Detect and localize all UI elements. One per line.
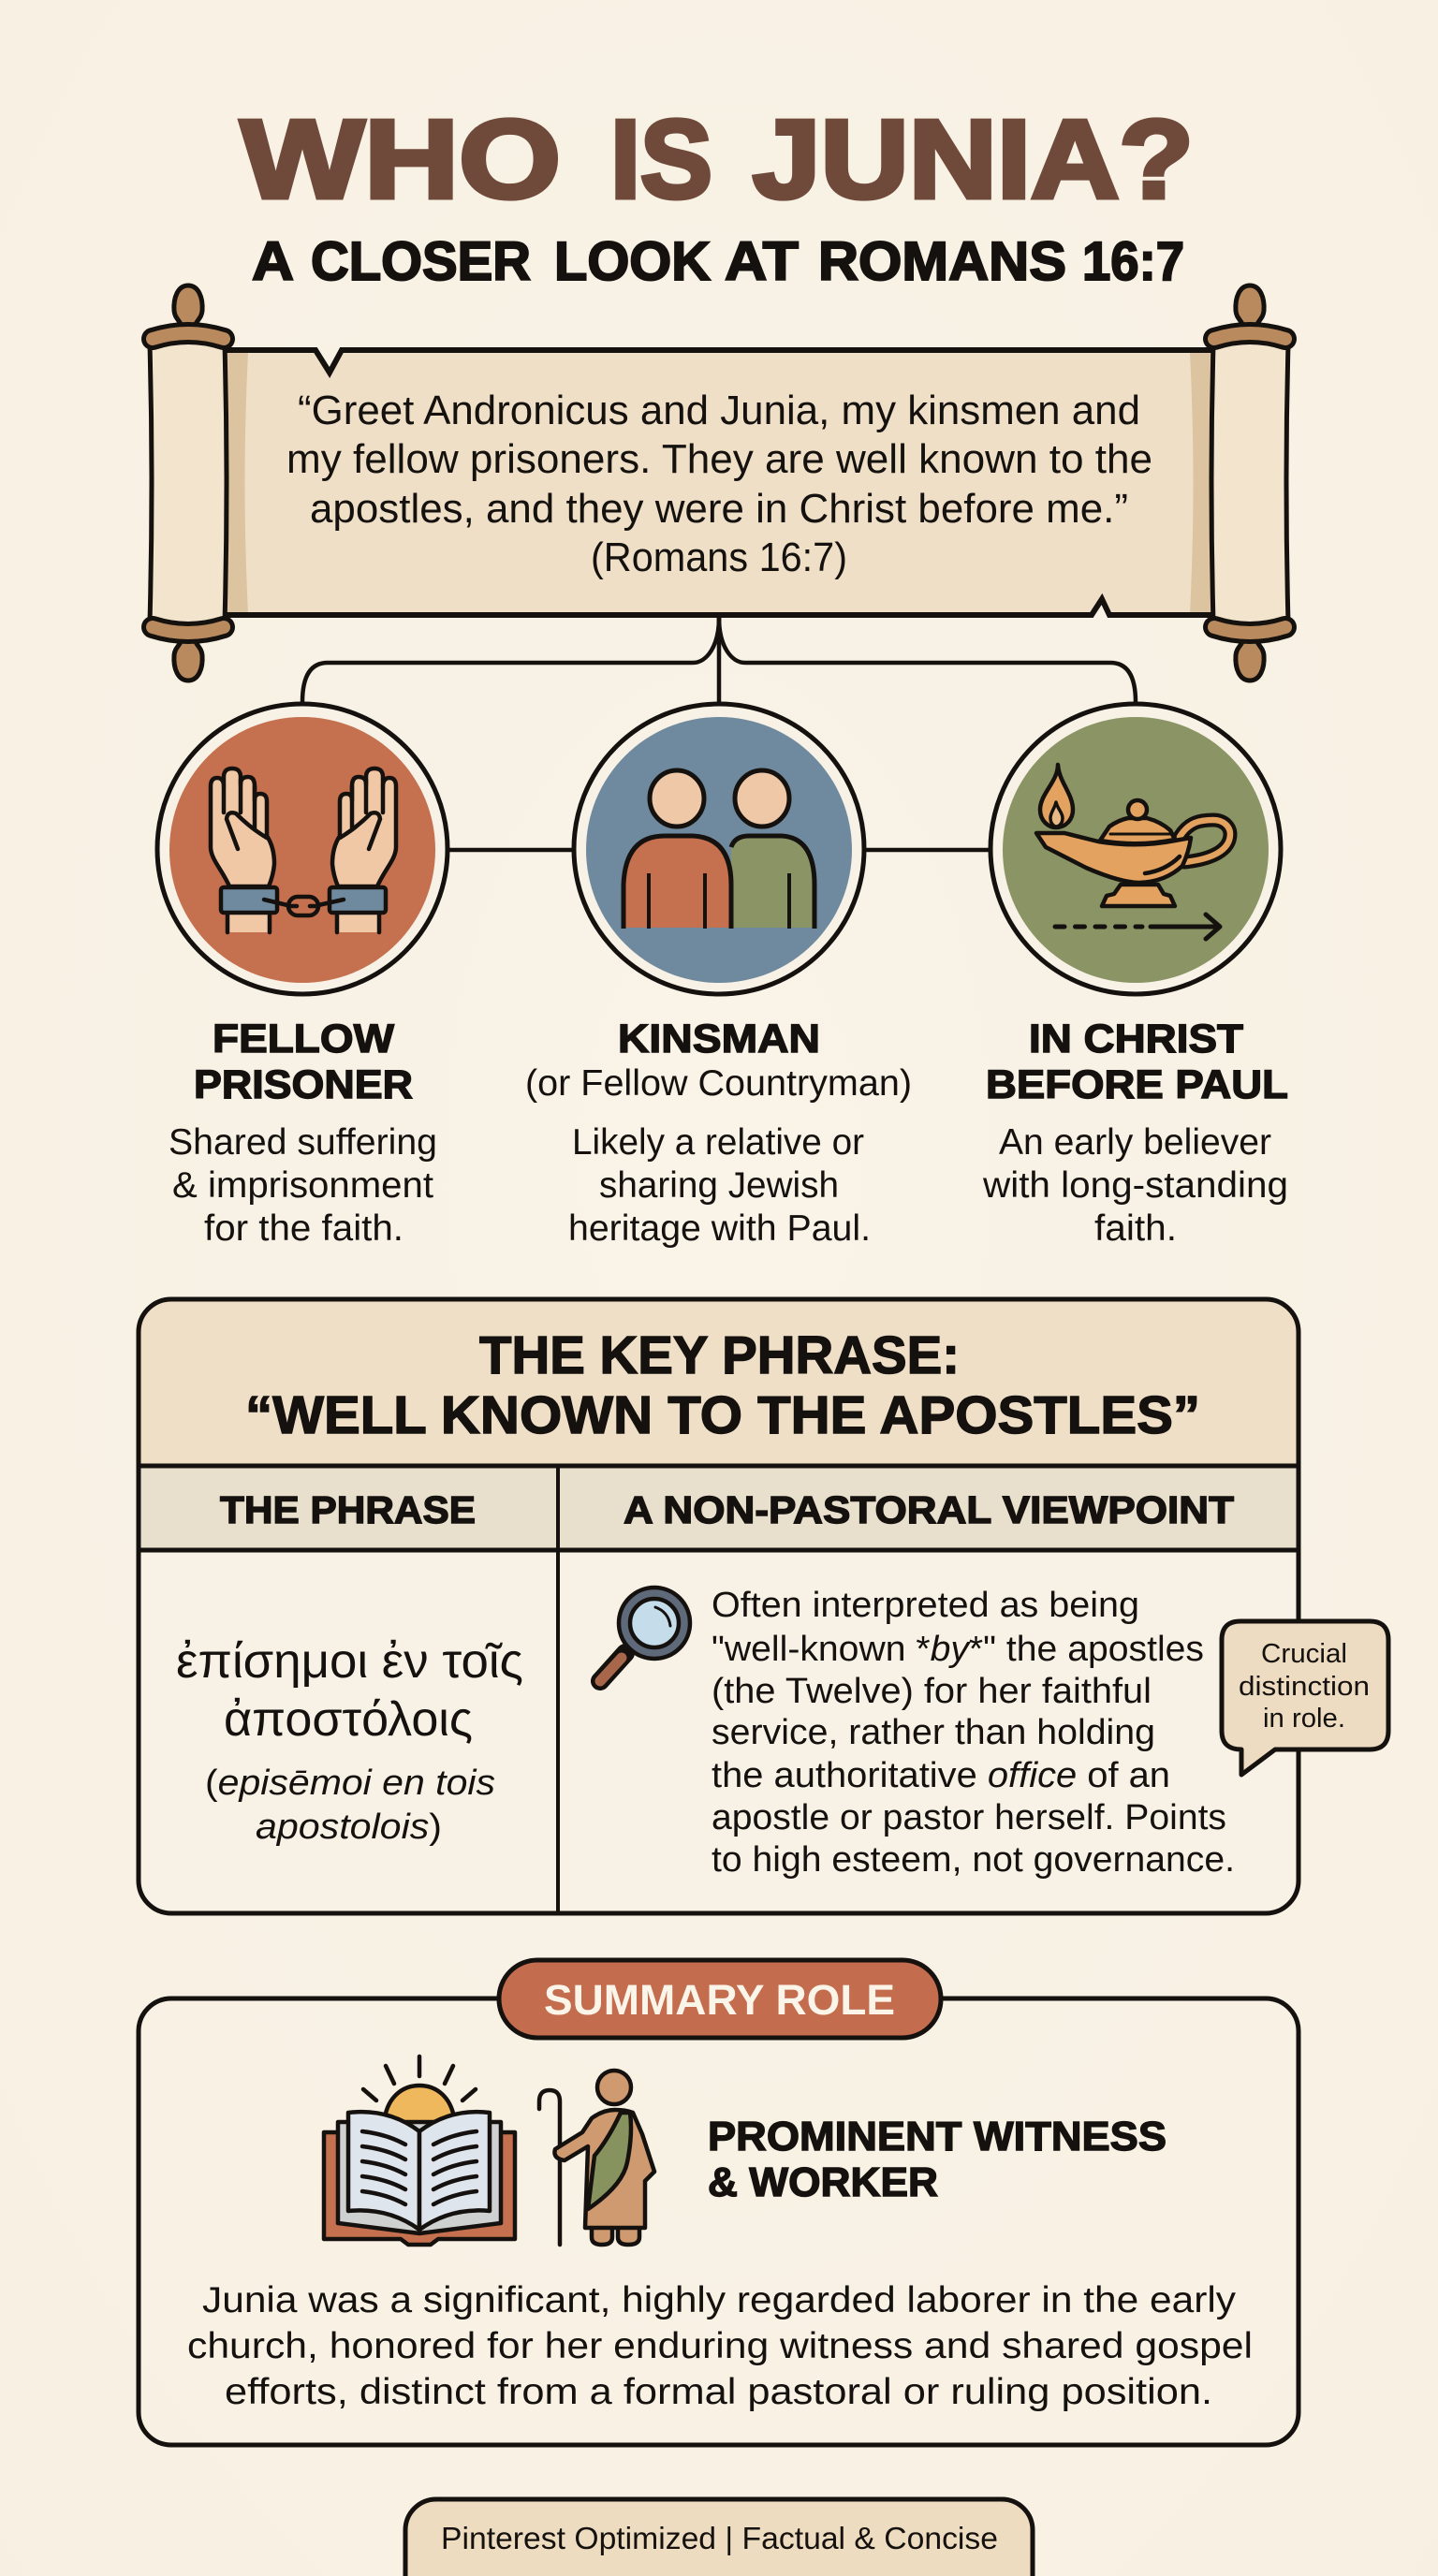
icon: chained hands	[157, 704, 448, 994]
left hand	[211, 768, 277, 932]
title	[241, 97, 1194, 222]
scroll paper	[225, 350, 1213, 615]
summary heading	[708, 2114, 1167, 2205]
heading: BEFORE PAUL	[986, 1062, 1288, 1107]
description: heritage with Paul.	[568, 1208, 871, 1249]
scroll with verse	[150, 285, 1288, 681]
column: fellow prisoner	[169, 1017, 437, 1249]
greek phrase: ἀποστόλοις	[224, 1692, 473, 1747]
title: WHO	[241, 97, 561, 222]
description: Shared suffering	[169, 1122, 437, 1163]
verse text	[286, 388, 1152, 580]
viewpoint text: service, rather than holding	[712, 1713, 1155, 1752]
verse text: my fellow prisoners. They are well known to the	[286, 436, 1152, 482]
progress arrow	[1055, 915, 1220, 939]
transliteration	[205, 1764, 495, 1847]
panel: summary role	[139, 1960, 1299, 2445]
icon: magnifying glass	[600, 1588, 690, 1681]
title: IS	[610, 97, 712, 222]
icon: figure with staff	[539, 2071, 654, 2245]
icon: open book and sun	[324, 2056, 515, 2245]
table heading	[245, 1325, 1200, 1445]
verse text: “Greet Andronicus and Junia, my kinsmen and	[298, 388, 1140, 433]
subtitle: CLOSER	[311, 231, 531, 292]
summary heading: & WORKER	[708, 2159, 938, 2205]
subheading: (or Fellow Countryman)	[525, 1063, 912, 1104]
column heading: the phrase: THE PHRASE	[220, 1488, 476, 1531]
callout	[1222, 1621, 1388, 1775]
subtitle: A	[252, 231, 294, 292]
verse text: (Romans 16:7)	[591, 534, 847, 580]
right scroll roller	[1211, 285, 1288, 681]
verse text: apostles, and they were in Christ before me.”	[310, 486, 1128, 532]
connector lines	[302, 615, 1136, 850]
summary text: Junia was a significant, highly regarded laborer in the early	[202, 2280, 1237, 2320]
subtitle: LOOK	[554, 231, 711, 292]
description: with long-standing	[982, 1165, 1288, 1206]
chain	[264, 897, 344, 915]
title: JUNIA?	[753, 97, 1194, 222]
viewpoint text: "well-known *by*" the apostles	[712, 1630, 1204, 1669]
viewpoint text: the authoritative office of an	[712, 1756, 1170, 1795]
transliteration: (episēmoi en tois	[205, 1764, 495, 1803]
description	[982, 1122, 1288, 1249]
subtitle: ROMANS	[818, 231, 1066, 292]
subtitle: AT	[725, 231, 799, 292]
subtitle: 16:7	[1082, 231, 1184, 292]
summary text: church, honored for her enduring witness and shared gospel	[187, 2326, 1253, 2366]
table heading: THE KEY PHRASE:	[479, 1325, 960, 1385]
summary heading: PROMINENT WITNESS	[708, 2114, 1167, 2159]
callout: Crucial	[1261, 1639, 1347, 1669]
heading: FELLOW	[213, 1017, 394, 1061]
greek phrase	[176, 1634, 523, 1747]
viewpoint text	[712, 1586, 1235, 1880]
transliteration: apostolois )	[256, 1808, 442, 1847]
viewpoint text: (the Twelve) for her faithful	[712, 1672, 1152, 1711]
heading: IN CHRIST	[1029, 1017, 1243, 1061]
summary text	[187, 2280, 1253, 2412]
icon: two kinsmen	[574, 704, 864, 994]
footer tag	[405, 2499, 1033, 2576]
summary badge: SUMMARY ROLE	[544, 1976, 895, 2024]
heading: PRISONER	[194, 1062, 413, 1107]
icon: oil lamp	[990, 704, 1281, 994]
description	[568, 1122, 871, 1249]
viewpoint text: to high esteem, not governance.	[712, 1840, 1235, 1880]
subtitle	[252, 231, 1184, 292]
left scroll roller	[150, 285, 227, 681]
heading	[194, 1017, 413, 1107]
heading	[986, 1017, 1288, 1107]
description: for the faith.	[204, 1208, 404, 1249]
right hand	[330, 768, 396, 932]
column: kinsman	[525, 1017, 912, 1249]
viewpoint text: Often interpreted as being	[712, 1586, 1139, 1625]
callout: in role.	[1263, 1704, 1345, 1734]
table heading: “WELL KNOWN TO THE APOSTLES”	[245, 1385, 1200, 1445]
column heading: viewpoint: A NON-PASTORAL VIEWPOINT	[624, 1488, 1234, 1531]
description: Likely a relative or	[572, 1122, 864, 1163]
callout: distinction	[1239, 1672, 1370, 1702]
description: sharing Jewish	[599, 1165, 839, 1206]
greek phrase: ἐπίσημοι ἐν τοῖς	[176, 1634, 523, 1689]
column: in Christ before Paul	[982, 1017, 1288, 1249]
description: An early believer	[999, 1122, 1271, 1163]
viewpoint text: apostle or pastor herself. Points	[712, 1798, 1226, 1837]
heading: KINSMAN	[618, 1017, 820, 1061]
footer tag: Pinterest Optimized | Factual & Concise	[441, 2521, 998, 2555]
summary badge	[499, 1960, 941, 2038]
summary box	[139, 1998, 1299, 2445]
panel: key phrase table	[139, 1299, 1388, 1913]
table backgrounds	[139, 1299, 1299, 1913]
description: & imprisonment	[172, 1165, 433, 1206]
description: faith.	[1094, 1208, 1177, 1249]
summary text: efforts, distinct from a formal pastoral or ruling position.	[225, 2372, 1212, 2412]
description	[169, 1122, 437, 1249]
